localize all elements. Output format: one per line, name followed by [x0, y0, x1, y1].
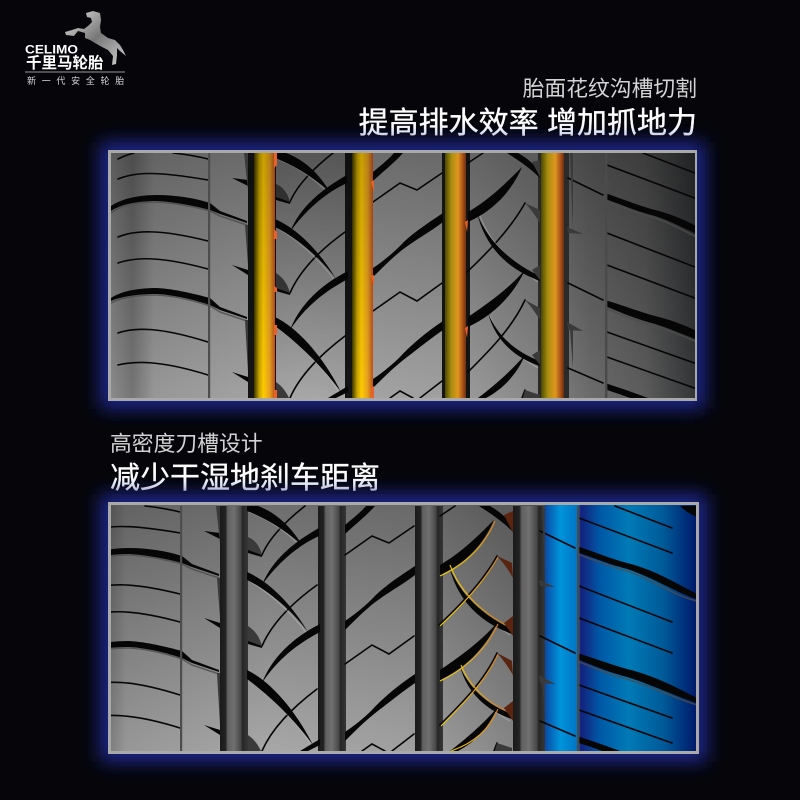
panel: sipes highlighted in yellow and blue: [72, 494, 712, 762]
blue shoulder zone: [545, 505, 697, 751]
brown sipe wedges: [497, 511, 513, 721]
panel: tread grooves highlighted in yellow: [100, 142, 740, 409]
yellow sipe edges: [440, 521, 512, 751]
yellow groove 4: [541, 153, 564, 398]
logo wordmark latin: CELIMO: [25, 42, 78, 56]
tyre image with coloured sipe zones: [111, 505, 696, 751]
heading: section two: 减少干湿地刹车距离: [110, 462, 380, 495]
yellow groove 3: [445, 153, 466, 398]
yellow groove 1: [254, 153, 275, 398]
logo tagline: 新一代安全轮胎: [27, 75, 130, 86]
tyre image with yellow grooves: [111, 153, 695, 398]
logo wordmark chinese: 千里马轮胎: [26, 54, 104, 72]
subtitle: section two: 高密度刀槽设计: [110, 431, 263, 456]
subtitle: section one: 胎面花纹沟槽切割: [523, 76, 697, 101]
heading: section one: 提高排水效率 增加抓地力: [359, 107, 697, 140]
logo: Celimo horse and wordmark: [25, 11, 130, 86]
icon: rearing horse: [65, 11, 126, 65]
yellow groove 2: [352, 153, 373, 398]
